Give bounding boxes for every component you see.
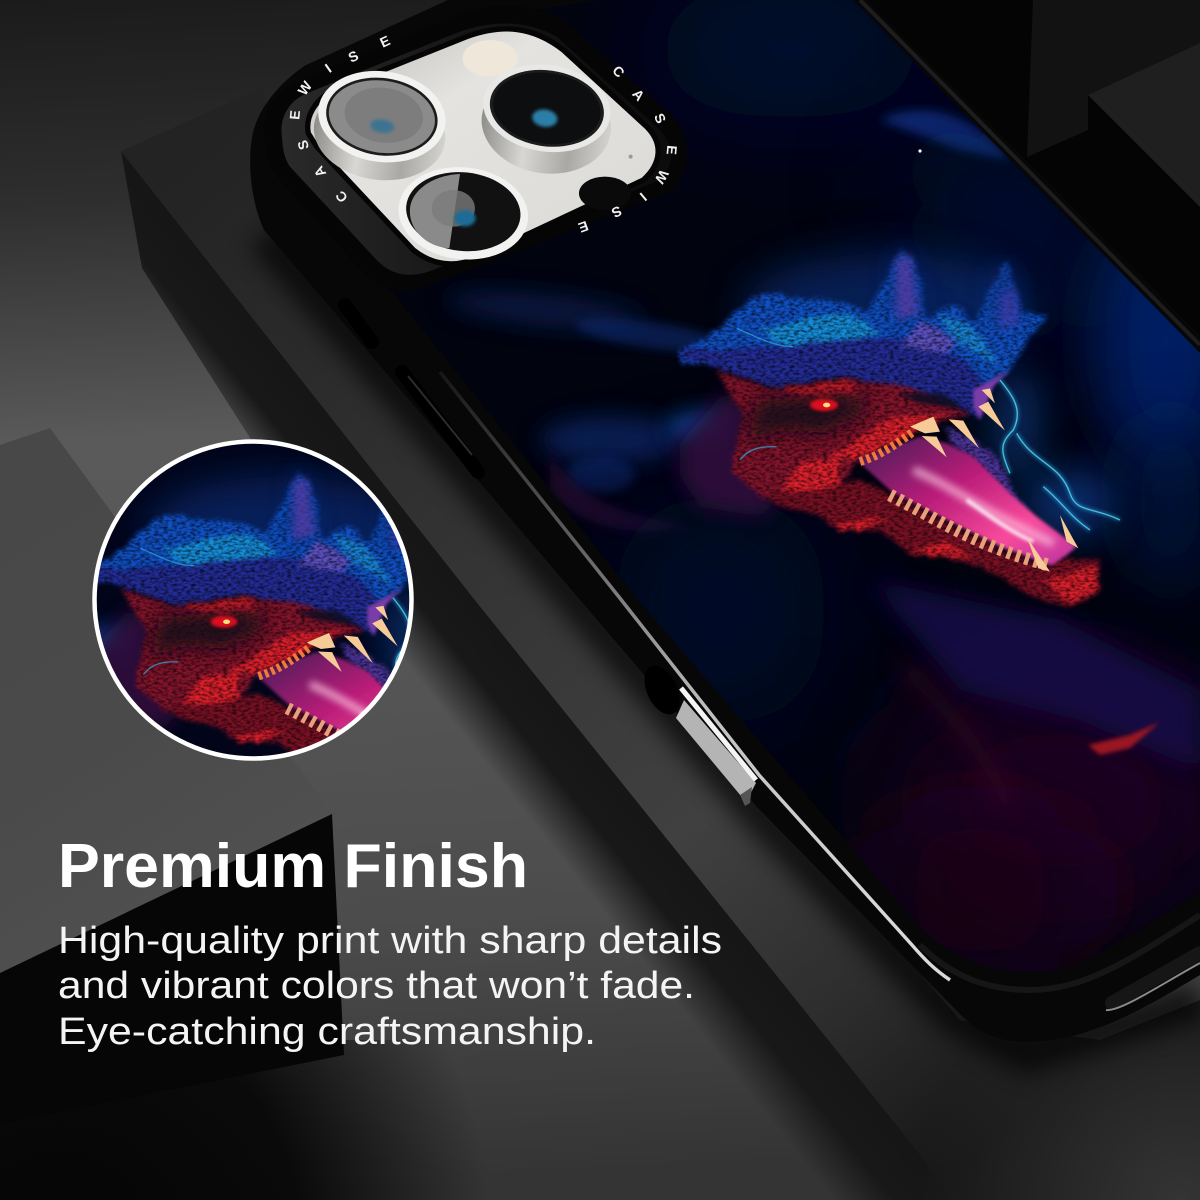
camera module: [268, 10, 683, 286]
CASEWISE lettering right: I: [637, 190, 650, 204]
flash: [463, 40, 517, 77]
description text: Eye-catching craftsmanship.: [58, 1011, 596, 1053]
lens three: [394, 161, 533, 266]
description text: High-quality print with sharp details: [58, 920, 722, 962]
camera plate: [308, 29, 658, 264]
lettering band: [281, 23, 671, 275]
lens one: [308, 63, 454, 189]
silver button: [676, 700, 756, 802]
description text: and vibrant colors that won’t fade.: [58, 965, 695, 1007]
CASEWISE lettering right: W: [651, 167, 672, 187]
CASEWISE lettering left: A: [310, 163, 329, 180]
CASEWISE lettering right: S: [609, 203, 624, 221]
glass edge highlight: [440, 372, 950, 980]
phone shadow: [264, 235, 1200, 1055]
volume button highlight: [408, 376, 472, 455]
detail circle: dragon close-up: [92, 439, 414, 761]
side buttons: [345, 305, 1200, 1010]
CASEWISE lettering left: E: [286, 110, 303, 120]
rear sensor hole: [579, 177, 631, 210]
background: main block side face and shadow band: [121, 151, 957, 1200]
button end: [740, 787, 752, 806]
CASEWISE lettering right: [576, 62, 680, 236]
background: upper right wall face: [1027, 0, 1200, 157]
background: dark floor falloff under the lower block: [0, 1040, 520, 1200]
usb port: [1112, 953, 1200, 1003]
camera bumper: [268, 10, 683, 286]
lens two: [474, 57, 619, 182]
phone back artwork: dragon: [430, 0, 1200, 972]
background: bottom right glow: [920, 940, 1200, 1200]
CASEWISE lettering left: S: [294, 138, 312, 152]
CASEWISE lettering left: [286, 32, 392, 206]
mute switch: [345, 305, 372, 342]
CASEWISE lettering right: C: [609, 62, 628, 81]
camera control hole: [637, 660, 687, 720]
CASEWISE lettering left: I: [322, 60, 334, 76]
phone case body: [250, 0, 1200, 1042]
CASEWISE lettering right: A: [629, 86, 648, 104]
case right edge line: [860, 0, 1200, 345]
volume button: [402, 372, 478, 472]
background: upper right block top: [1088, 43, 1200, 207]
background: upper right dark area: [500, 0, 1200, 420]
description text: [58, 920, 722, 1053]
background: lower left block side: [0, 814, 344, 1124]
CASEWISE lettering right: E: [664, 145, 680, 155]
CASEWISE lettering left: E: [377, 32, 392, 51]
title: Premium Finish: [58, 832, 528, 901]
CASEWISE lettering right: S: [651, 111, 669, 126]
microphone dot: [629, 155, 633, 159]
CASEWISE lettering right: E: [576, 218, 591, 236]
case rim sheen: [920, 915, 1200, 990]
CASEWISE lettering left: W: [294, 77, 316, 98]
usb port edge: [1106, 963, 1200, 1010]
background: lower left block top: [0, 428, 332, 973]
CASEWISE lettering left: C: [332, 188, 351, 206]
silver button highlight: [681, 688, 756, 780]
CASEWISE lettering left: S: [346, 47, 361, 66]
